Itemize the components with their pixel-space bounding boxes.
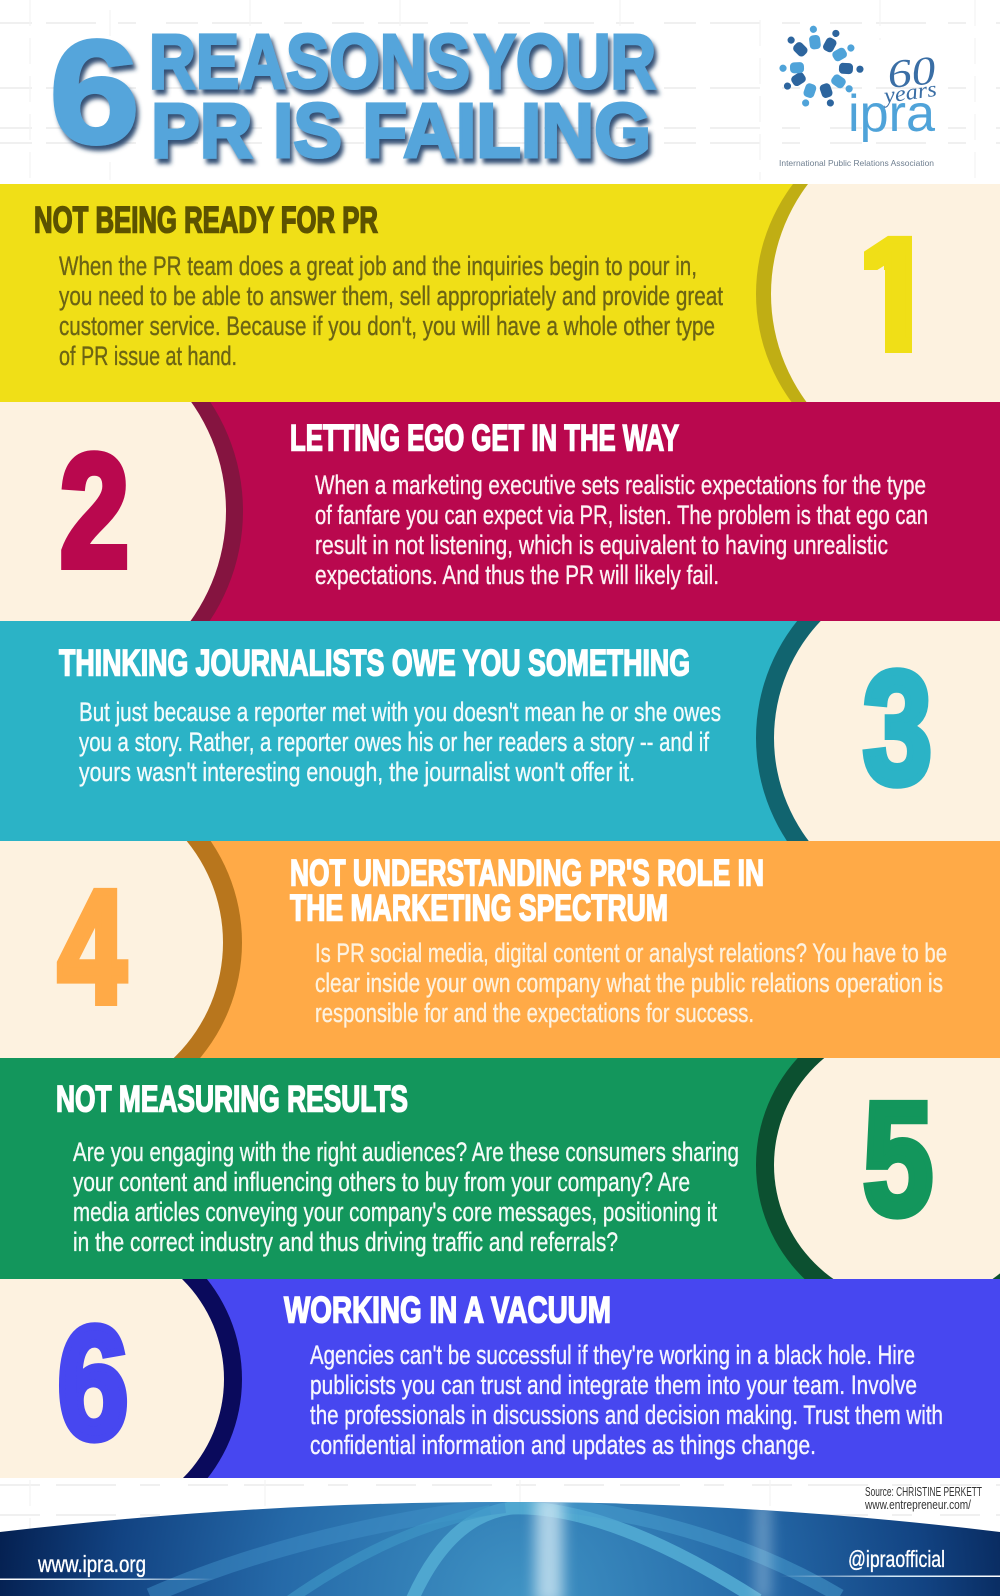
IPRA 60 years logo — [779, 25, 938, 168]
footer social handle: @ipraofficial — [848, 1546, 945, 1572]
panel: reason 5 — [0, 1058, 1000, 1279]
body 5: in the correct industry and thus driving traffic and referrals? — [73, 1227, 618, 1257]
number 1: 1 — [851, 205, 939, 384]
title word REASONS: REASONS — [149, 19, 470, 105]
body 6 — [310, 1340, 943, 1460]
body 5 — [73, 1137, 739, 1257]
panel: reason 1 — [0, 184, 1000, 402]
panel: reason 6 — [0, 1279, 1000, 1478]
number 5: 5 — [863, 1069, 933, 1248]
title line 2: PR IS FAILING — [151, 88, 651, 174]
panel: reason 3 — [0, 621, 1000, 841]
heading 6: WORKING IN A VACUUM — [284, 1290, 611, 1330]
body 3 — [79, 697, 721, 787]
body 2 — [315, 470, 928, 590]
body 3: yours wasn't interesting enough, the journalist won't offer it. — [79, 757, 635, 787]
heading 4 — [290, 852, 764, 928]
body 4 — [315, 938, 947, 1028]
body 4: responsible for and the expectations for success. — [315, 998, 754, 1028]
body 5: Are you engaging with the right audiences? Are these consumers sharing — [73, 1137, 739, 1167]
number 2: 2 — [60, 421, 129, 600]
panel: reason 2 — [0, 402, 1000, 621]
icon: ring of people — [779, 25, 864, 108]
number 4: 4 — [58, 857, 126, 1036]
footer website: www.ipra.org — [37, 1551, 146, 1577]
title — [49, 10, 656, 175]
logo text: years: years — [880, 76, 938, 108]
source credit — [864, 1484, 982, 1512]
body 1: When the PR team does a great job and the inquiries begin to pour in, — [59, 251, 697, 281]
heading 4: NOT UNDERSTANDING PR'S ROLE IN — [290, 852, 764, 894]
number 3: 3 — [863, 638, 932, 817]
source credit: www.entrepreneur.com/ — [864, 1497, 971, 1512]
logo caption: International Public Relations Association — [779, 158, 934, 168]
logo text: ipra: ipra — [848, 85, 935, 143]
body 1: you need to be able to answer them, sell appropriately and provide great — [59, 281, 723, 311]
body 5: media articles conveying your company's core messages, positioning it — [73, 1197, 717, 1227]
body 3: But just because a reporter met with you doesn't mean he or she owes — [79, 697, 721, 727]
panel: reason 4 — [0, 841, 1000, 1058]
heading 4: THE MARKETING SPECTRUM — [290, 888, 668, 928]
body 2: expectations. And thus the PR will likely fail. — [315, 560, 719, 590]
body 6: confidential information and updates as things change. — [310, 1430, 816, 1460]
heading 3: THINKING JOURNALISTS OWE YOU SOMETHING — [59, 642, 690, 684]
footer banner — [0, 1495, 1000, 1596]
body 1: customer service. Because if you don't, you will have a whole other type — [59, 311, 715, 341]
heading 5: NOT MEASURING RESULTS — [56, 1078, 408, 1120]
heading 1: NOT BEING READY FOR PR — [34, 200, 378, 240]
logo text: 60: 60 — [885, 47, 938, 97]
body 3: you a story. Rather, a reporter owes his or her readers a story -- and if — [79, 727, 709, 757]
body 5: your content and influencing others to buy from your company? Are — [73, 1167, 690, 1197]
title numeral 6: 6 — [49, 10, 140, 175]
title word YOUR: YOUR — [474, 19, 656, 105]
body 1 — [59, 251, 723, 371]
body 1: of PR issue at hand. — [59, 341, 237, 371]
heading 2: LETTING EGO GET IN THE WAY — [290, 418, 679, 458]
number 6: 6 — [58, 1293, 128, 1472]
